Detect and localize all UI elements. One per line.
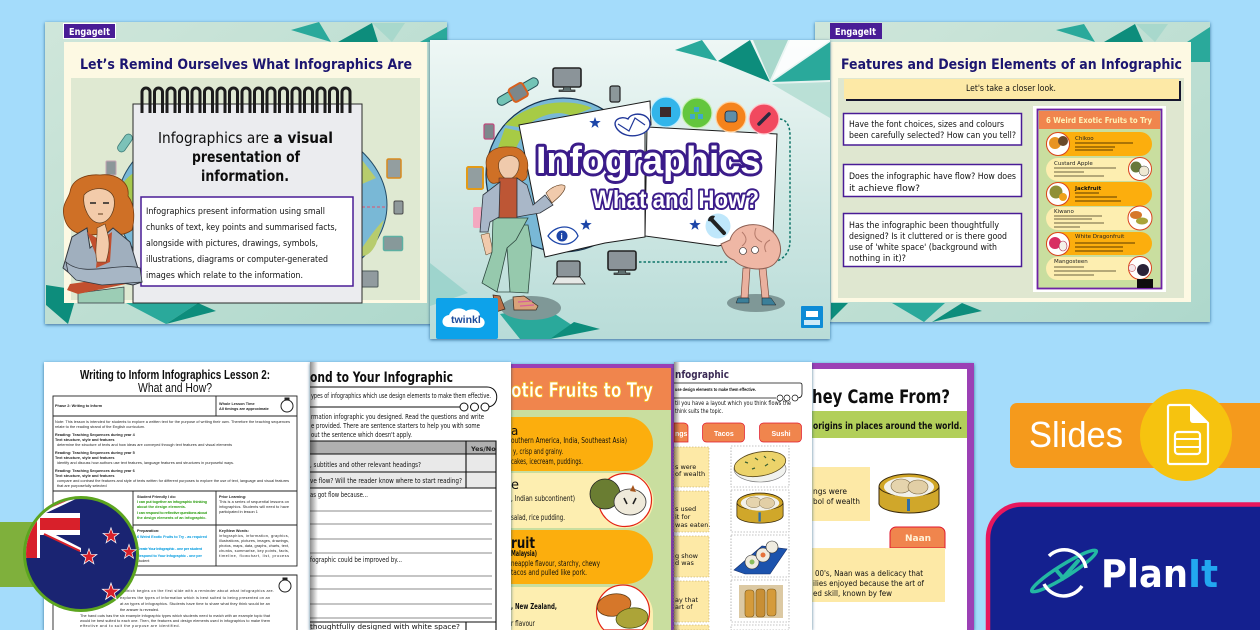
definition box: illustrations, diagrams or computer-generated xyxy=(146,255,328,265)
image: dumpling basket xyxy=(737,493,783,523)
checklist table xyxy=(310,441,496,630)
resource type banner xyxy=(1010,389,1260,481)
lesson table text: explores the types of information which is best suited to being presented on an xyxy=(120,596,270,600)
decorative triangles xyxy=(46,22,447,324)
lesson table text: Respond to Your Infographic - one per xyxy=(137,554,203,558)
lesson plan title: What and How? xyxy=(138,381,212,395)
logo: twinkl: twinkl xyxy=(451,314,481,326)
lesson table text: Text structure, style and features xyxy=(55,438,114,442)
aim speech bar: ypes of infographics which use design elements to make them effective. xyxy=(311,392,491,400)
naan text box xyxy=(812,548,945,602)
green ribbon behind flag xyxy=(0,522,40,587)
tab: Tacos: Tacos xyxy=(714,431,734,438)
lesson table text: compare and contrast the features and style of texts written for different purposes to explore the use of text, language and visual features xyxy=(57,479,289,483)
lesson table text: I can respond to reflective questions about xyxy=(137,511,208,515)
lesson table text: determine the structure of texts and how ideas are conveyed through text features and visual elements xyxy=(57,443,232,447)
dumpling basket image xyxy=(879,474,939,513)
tag: EngageIt xyxy=(63,23,116,39)
lesson table text: effective and to suit the purpose are identified. xyxy=(80,624,180,628)
cream content panel xyxy=(64,42,427,303)
fruit image: custard apple xyxy=(590,474,652,526)
notebook headline: presentation of xyxy=(192,148,300,166)
globe illustration xyxy=(486,98,640,252)
dumplings text box xyxy=(812,467,870,521)
inner panel xyxy=(838,78,1184,298)
character: teacher presenting xyxy=(473,147,565,320)
callout: closer look bar: Let's take a closer look. xyxy=(966,84,1056,94)
fruit row: Custard Apple: Custard Apple xyxy=(1054,161,1093,167)
lesson table text: I can put together an infographic thinking xyxy=(137,500,208,504)
worksheet heading: nfographic xyxy=(675,368,729,381)
poster header: otic Fruits to Try xyxy=(511,378,653,402)
floating device icons xyxy=(467,68,620,189)
question box: design: use of 'white space' (background with xyxy=(849,243,997,253)
tab: Naan xyxy=(890,527,945,548)
match card text: s used xyxy=(675,505,696,513)
lesson table grid xyxy=(53,396,297,630)
match card text: ay that xyxy=(675,596,699,604)
fruit row: Kiwano xyxy=(511,585,653,630)
badge: New Zealand flag xyxy=(23,494,139,612)
icon: stopwatch lower xyxy=(279,578,291,592)
lesson table text: All timings are approximate xyxy=(219,407,269,411)
device icons xyxy=(106,133,403,287)
match cards: text xyxy=(674,447,709,630)
checklist table: as got flow because... xyxy=(310,491,368,499)
poster logo xyxy=(1137,279,1153,288)
badge: blue xyxy=(651,97,681,127)
lesson table text: which begins on the first slide with a reminder about what infographics are. xyxy=(124,589,274,593)
globe illustration xyxy=(122,152,388,258)
fruit row: Chikoo: cakes, icecream, puddings. xyxy=(511,457,583,466)
lesson table text: Prior Learning: xyxy=(219,495,246,499)
worksheet instructions: think suits the topic. xyxy=(675,409,723,415)
origins subheading bar: origins in places around the world. xyxy=(813,421,962,432)
naan text box: ed skill, known by few xyxy=(813,589,892,598)
lesson table text: photos, maps, data, graphs, charts, text, xyxy=(219,544,289,548)
lesson table text: Note: This lesson is intended for students to explore a written text for the purpose of writing their own. Therefore the teaching sequences xyxy=(55,420,290,424)
fruit row: Mangosteen xyxy=(1046,256,1152,280)
icon: slides document xyxy=(1140,389,1232,481)
worksheet instructions: til you have a layout which you think flows the xyxy=(675,401,791,407)
badge: green xyxy=(682,98,712,128)
lesson table text: The hand outs has the six example infographic types which students need to match with an example topic that xyxy=(80,614,271,618)
image: sushi xyxy=(734,541,787,574)
question box: design: designed? Is it cluttered or is there good xyxy=(849,232,1007,242)
match card text: g show xyxy=(675,552,699,560)
lesson table text: Create Your Infographic - one per student xyxy=(137,547,203,551)
fruit row: Chikoo: a xyxy=(511,424,518,438)
panel: lesson plan sheet xyxy=(44,362,312,630)
fruit row: Jackfruit: Malaysia) xyxy=(511,549,537,558)
tag: EngageIt xyxy=(830,23,882,39)
checklist table: fographic could be improved by... xyxy=(310,556,402,564)
icon: monitor xyxy=(608,251,636,274)
match card text: s were xyxy=(675,463,696,471)
question box: design: Has the infographic been thoughtfully xyxy=(849,221,1000,231)
lesson table text: would be best suited to each one. Then, the features and design elements used in infographics to make them xyxy=(80,619,270,623)
question box: fonts: Have the font choices, sizes and colours xyxy=(849,120,1004,130)
match card text: of wealth xyxy=(675,470,705,478)
dotted connector xyxy=(639,119,790,262)
lesson table text: infographics. Students will need to have xyxy=(219,505,289,509)
lesson table text: relate to the reading strand of the English curriculum. xyxy=(55,425,145,429)
fruit image: kiwano xyxy=(595,585,650,630)
left page xyxy=(519,101,651,257)
fruit row: Custard Apple: , Indian subcontinent) xyxy=(511,494,575,503)
origins heading: hey Came From? xyxy=(812,386,950,408)
question box: flow xyxy=(844,164,1022,196)
lesson table text: that are purposefully selected xyxy=(57,484,107,488)
tag: EngageIt: EngageIt xyxy=(835,27,876,38)
lesson table text: Reading: Teaching Sequences during year 4 xyxy=(55,433,136,437)
fruit row: Custard Apple xyxy=(511,473,654,528)
lesson table text: about the design elements. xyxy=(137,505,186,509)
notebook spiral rings xyxy=(142,88,350,113)
icon: wrench xyxy=(706,214,730,238)
worksheet instructions: e provided. There are sentence starters to help you with some xyxy=(311,422,480,430)
dumplings text box: bol of wealth xyxy=(813,497,860,506)
character: thinking teacher xyxy=(63,175,142,303)
panel: food origins sheet xyxy=(812,363,974,630)
match card text: d was xyxy=(675,559,694,567)
lesson table text: chunks, summarise, key points, facts, xyxy=(219,549,289,553)
lesson table text: the design elements of an infographic. xyxy=(137,516,206,520)
fruit row: Kiwano: r flavour xyxy=(511,619,536,628)
lesson table text: Text structure, style and features xyxy=(55,456,114,460)
image: naan plate xyxy=(732,448,788,482)
logo: twinkl xyxy=(436,298,498,339)
aim speech bar xyxy=(674,383,802,401)
lesson table text: illustrations, pictures, images, drawings, xyxy=(219,539,289,543)
fruit row: Chikoo: outhern America, India, Southeast Asia) xyxy=(511,436,627,445)
fruit row: Kiwano: Kiwano xyxy=(1054,209,1074,215)
badge: orange xyxy=(716,102,746,132)
definition box: Infographics present information using small xyxy=(146,207,325,217)
worksheet instructions: out the sentence which doesn't apply. xyxy=(311,431,412,439)
fruit row: Chikoo xyxy=(511,417,653,471)
tab: Dumplings: ngs xyxy=(675,431,688,438)
definition box xyxy=(141,197,353,286)
fruit row: Kiwano: , New Zealand, xyxy=(511,602,557,611)
panel: centre title slide xyxy=(430,40,830,339)
lesson table text: student xyxy=(137,559,150,563)
fruit row: Chikoo: y, crisp and grainy. xyxy=(513,447,563,456)
lesson table text: Text structure, style and features xyxy=(55,474,114,478)
question box: design: nothing in it)? xyxy=(849,254,906,264)
tab: Sushi: Sushi xyxy=(772,431,791,438)
image: tacos xyxy=(739,585,783,618)
heading: Features and Design Elements of an Infographic xyxy=(841,57,1182,73)
banner label: Slides xyxy=(1029,414,1123,455)
lesson table text: Phase 2: Writing to Inform xyxy=(55,404,103,408)
question box: flow: it achieve flow? xyxy=(849,184,920,194)
logo: PlanIt wordmark: PlanIt xyxy=(1101,552,1218,596)
icon: eye xyxy=(548,227,578,244)
notebook xyxy=(133,88,362,303)
fruit row: Custard Apple: salad, rice pudding. xyxy=(511,513,565,522)
tag: EngageIt: EngageIt xyxy=(69,27,110,38)
match card text: it for xyxy=(675,513,691,521)
flag stars xyxy=(82,529,135,598)
fruit row: White Dragonfruit: White Dragonfruit xyxy=(1075,234,1125,240)
worksheet heading: ond to Your Infographic xyxy=(310,370,453,386)
lesson table text: Student Friendly I do: xyxy=(137,495,176,499)
lesson table text: at an types of infographics. Students have time to share what they think would be an xyxy=(120,602,270,606)
callout: closer look bar xyxy=(844,79,1181,101)
fruit row: Chikoo xyxy=(1046,132,1152,156)
panel: slide right - features and design elements xyxy=(815,22,1210,322)
checklist table: Yes/No xyxy=(470,445,496,453)
title: Infographics: Infographics xyxy=(536,140,761,182)
poster header xyxy=(1039,111,1160,129)
fruit row: Custard Apple xyxy=(1046,158,1152,181)
question box: design xyxy=(844,214,1022,266)
origins subheading bar xyxy=(812,411,967,438)
aim speech bar: use design elements to make them effective. xyxy=(675,387,756,392)
definition box: alongside with pictures, drawings, symbols, xyxy=(146,239,318,249)
lesson table text: This is a series of sequential lessons on xyxy=(219,500,289,504)
dumplings text box: ngs were xyxy=(813,487,847,496)
panel: create infographic worksheet xyxy=(674,362,812,630)
fruit row: Jackfruit: ruit xyxy=(511,534,535,552)
decorative triangles xyxy=(831,24,1210,322)
lesson table text: participated in lesson 1 xyxy=(219,510,258,514)
panel: respond to infographic worksheet xyxy=(310,362,511,630)
tab: Naan: Naan xyxy=(905,534,931,544)
fruit row: Jackfruit xyxy=(1046,182,1152,206)
decorative triangles xyxy=(430,40,830,339)
lesson table text: infographics, information, graphics, xyxy=(219,534,289,538)
definition box: chunks of text, key points and summarised facts, xyxy=(146,223,337,233)
panel: PlanIt brand card xyxy=(988,504,1260,630)
question box: fonts xyxy=(844,114,1022,145)
lesson table text: 6 Weird Exotic Fruits to Try - as required xyxy=(137,535,208,539)
fruit row: Chikoo: Chikoo xyxy=(1075,136,1094,142)
lesson table text: Reading: Teaching Sequences during year 5 xyxy=(55,451,135,455)
definition box: images which relate to the information. xyxy=(146,271,303,281)
lesson plan title: Writing to Inform Infographics Lesson 2: xyxy=(80,368,270,382)
worksheet instructions: rmation infographic you designed. Read the questions and write xyxy=(311,413,484,421)
sheet edge shadow xyxy=(310,362,318,630)
match card text: art of xyxy=(675,603,693,611)
logo: PlanIt orbit mark xyxy=(1029,546,1099,596)
icon: cloud network xyxy=(615,114,650,136)
lesson table text: Preparation: xyxy=(137,529,159,533)
tab: Sushi xyxy=(760,423,802,442)
logo: quality badge xyxy=(801,306,823,328)
lesson table text: the answer is revealed. xyxy=(120,608,159,612)
lesson table text: Whole Lesson Time xyxy=(219,402,255,406)
aim speech bar xyxy=(310,387,497,411)
icon: laptop xyxy=(553,261,585,284)
stars xyxy=(580,117,701,230)
poster header xyxy=(511,368,674,630)
fruit row: Mangosteen: Mangosteen xyxy=(1054,259,1088,265)
tab: Dumplings xyxy=(674,423,688,442)
icon: eye: i xyxy=(560,232,563,241)
panel: slide left - remind what infographics are xyxy=(45,22,447,324)
lesson table text: identify and discuss how authors use text features, language features and structures in purposeful ways. xyxy=(57,461,234,465)
icon: stopwatch top xyxy=(281,398,293,412)
lesson table text: Reading: Teaching Sequences during year 6 xyxy=(55,469,135,473)
icon: smartwatch xyxy=(496,76,540,107)
match card text xyxy=(675,463,710,611)
poster header: 6 Weird Exotic Fruits to Try xyxy=(1046,116,1153,125)
badge: red xyxy=(749,104,779,134)
naan text box: 00's, Naan was a delicacy that xyxy=(815,569,923,578)
cream content panel xyxy=(831,42,1191,302)
fruit row: Jackfruit: tacos and pulled like pork. xyxy=(511,568,587,577)
question box: fonts: been carefully selected? How can you tell? xyxy=(849,131,1016,141)
match cards: images xyxy=(731,446,789,630)
question box: flow: Does the infographic have flow? How does xyxy=(849,172,1016,182)
fruit row: Kiwano xyxy=(1046,206,1152,230)
naan text box: ilies enjoyed because the art of xyxy=(813,579,924,588)
notebook headline: information. xyxy=(201,167,289,185)
character: walking brain xyxy=(721,225,785,312)
illustrated background area xyxy=(71,78,420,300)
fruit row: Jackfruit: neapple flavour, starchy, chewy xyxy=(511,559,600,568)
checklist table: ve flow? Will the reader know where to start reading? xyxy=(310,477,462,485)
tab: Tacos xyxy=(702,423,744,442)
panel: fruits poster sheet xyxy=(511,364,674,630)
poster thumbnail xyxy=(1033,106,1166,292)
notebook headline: Infographics are a visual xyxy=(158,129,339,147)
checklist table: , subtitles and other relevant headings? xyxy=(310,461,421,469)
fruit row: White Dragonfruit xyxy=(1046,232,1152,256)
writing lines xyxy=(310,511,492,618)
heading: Let’s Remind Ourselves What Infographics Are xyxy=(80,57,412,73)
right page xyxy=(645,127,777,246)
lesson table text: timeline, flowchart, list, process xyxy=(219,554,289,558)
subtitle: What and How?: What and How? xyxy=(592,186,759,214)
lesson table text xyxy=(55,402,290,628)
sheet edge shadow xyxy=(674,362,680,630)
fruit row: Custard Apple: e xyxy=(511,478,519,493)
fruit row: Jackfruit: Jackfruit xyxy=(1074,186,1102,192)
lesson table text: Key/New Words: xyxy=(219,529,249,533)
match card text: was eaten. xyxy=(675,521,710,529)
fruit row: Jackfruit xyxy=(511,530,653,584)
